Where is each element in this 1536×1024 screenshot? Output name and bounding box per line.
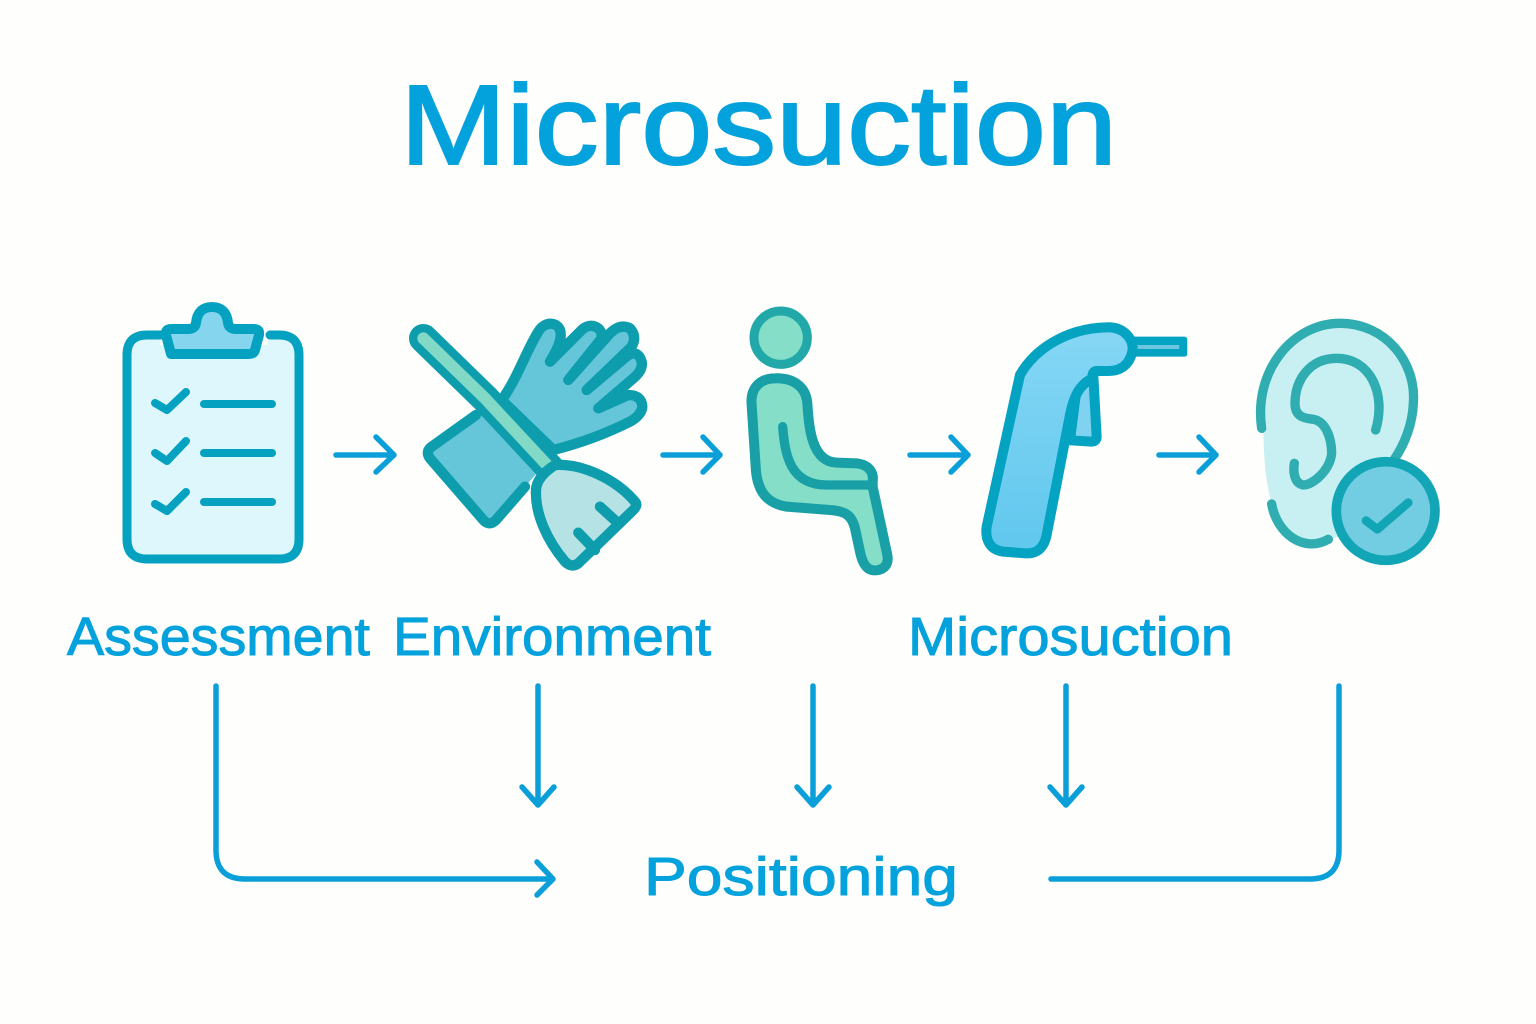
icon: glove and broom [423,324,642,565]
arrow: assessment elbow to positioning [216,686,553,895]
icon: seated person [751,311,888,570]
arrow: environment down [522,686,554,805]
icon: microsuction device [986,327,1187,553]
arrow: person down [797,686,829,805]
ear outline [1261,323,1414,544]
person head [754,311,807,364]
label: positioning: Positioning [644,847,958,907]
title: Microsuction [400,62,1117,188]
label: environment: Environment [393,607,711,667]
arrow: gloves to seated person [663,437,720,472]
broom head [536,465,636,565]
ear fill [1263,325,1413,541]
clipboard clip [166,307,259,354]
label: assessment: Assessment [67,607,370,667]
device nozzle [1132,337,1187,357]
icon: ear with check badge [1261,323,1435,560]
icon: clipboard checklist [127,307,299,559]
broom handle [423,338,552,470]
checklist rows [155,392,272,511]
device trigger [1070,375,1097,442]
arrow: microsuction down [1050,686,1082,805]
person body [751,378,888,570]
person arm [783,427,872,485]
arrow: person to microsuction device [910,437,968,472]
check badge [1336,462,1435,560]
device body [986,327,1133,553]
inner ear [1294,358,1379,485]
arrow: assessment to gloves [336,437,394,472]
label: microsuction: Microsuction [908,607,1233,667]
glove hand [502,324,642,450]
arrow: ear elbow line [1051,686,1339,879]
glove cuff [428,412,537,523]
arrow: device to ear [1159,437,1216,472]
